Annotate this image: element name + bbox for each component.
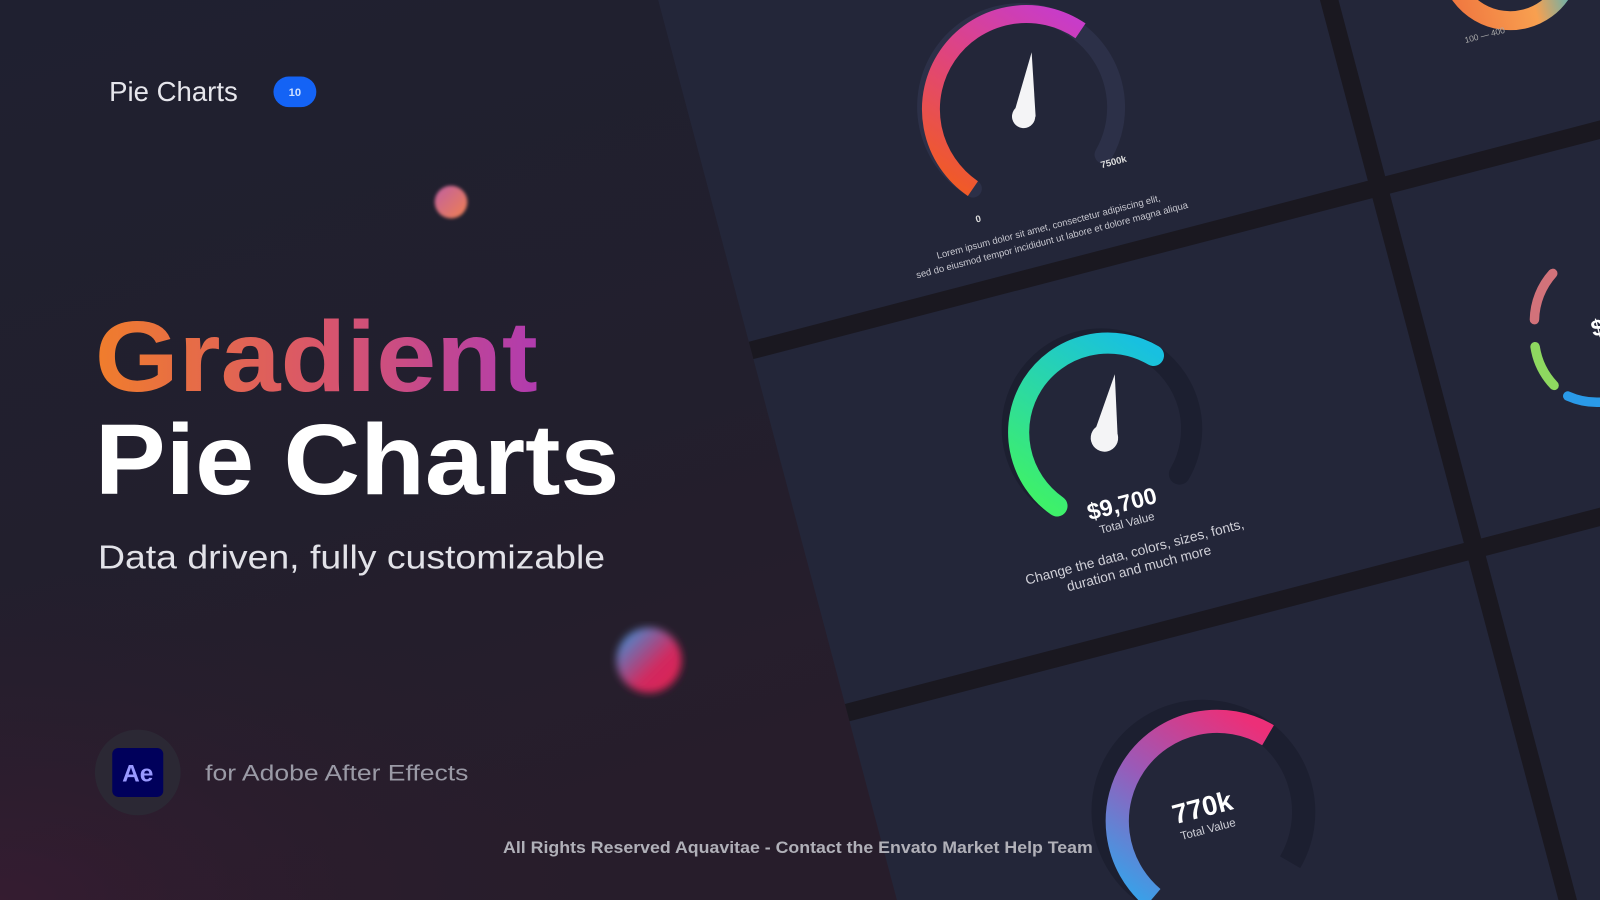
value: $9,700: $9,700 [1084, 482, 1159, 525]
badge [273, 77, 316, 107]
panel: right column bottom [1486, 526, 1600, 900]
panel: bottom gauge [849, 560, 1573, 900]
value: $9,700 [1087, 488, 1156, 534]
badge: 10 [289, 87, 301, 99]
Ae badge: Ae [122, 761, 153, 788]
gauge: blue-pink: 770k [1169, 785, 1237, 830]
footer: All Rights Reserved Aquavitae - Contact the Envato Market Help Team [503, 839, 1093, 857]
donut: 100 — 400 [1463, 25, 1506, 45]
gauge: orange-magenta: 7500k [1100, 154, 1129, 171]
decorative orb: orange [435, 186, 467, 218]
title [99, 318, 615, 495]
gauge: blue-pink [1092, 700, 1315, 900]
text: description: Change the data, colors, sizes, fonts, [1024, 516, 1246, 588]
panel: top gauge [602, 0, 1368, 342]
donut [1452, 0, 1568, 43]
brand label [109, 76, 316, 107]
segmented ring [1530, 268, 1600, 407]
title: Pie Charts [95, 404, 619, 516]
panel: right column middle [1390, 139, 1600, 538]
text: lorem: Lorem ipsum dolor sit amet, consectetur adipiscing elit, [936, 193, 1162, 262]
panel: right column top [1338, 0, 1600, 176]
subtitle: Data driven, fully customizable [98, 539, 605, 576]
decorative orb: blurred [616, 628, 682, 693]
panel grid [581, 0, 1600, 900]
Ae badge [95, 730, 181, 815]
value: $9,700: Total Value [1098, 510, 1156, 537]
brand label: Pie Charts [109, 76, 238, 107]
title: Gradient [95, 301, 538, 413]
gauge: blue-pink: Total Value [1179, 816, 1237, 843]
gauge: orange-magenta [917, 3, 1127, 222]
panel: middle gauge [753, 198, 1464, 704]
gauge: green-cyan [992, 319, 1205, 513]
left edge fill over grid [636, 0, 897, 900]
text: lorem: sed do eiusmod tempor incididunt ut labore et dolore magna aliqua [915, 200, 1190, 281]
text: for Adobe After Effects: for Adobe After Effects [205, 761, 468, 786]
text: description: duration and much more [1065, 542, 1213, 594]
gauge: orange-magenta: 0 [974, 214, 982, 225]
